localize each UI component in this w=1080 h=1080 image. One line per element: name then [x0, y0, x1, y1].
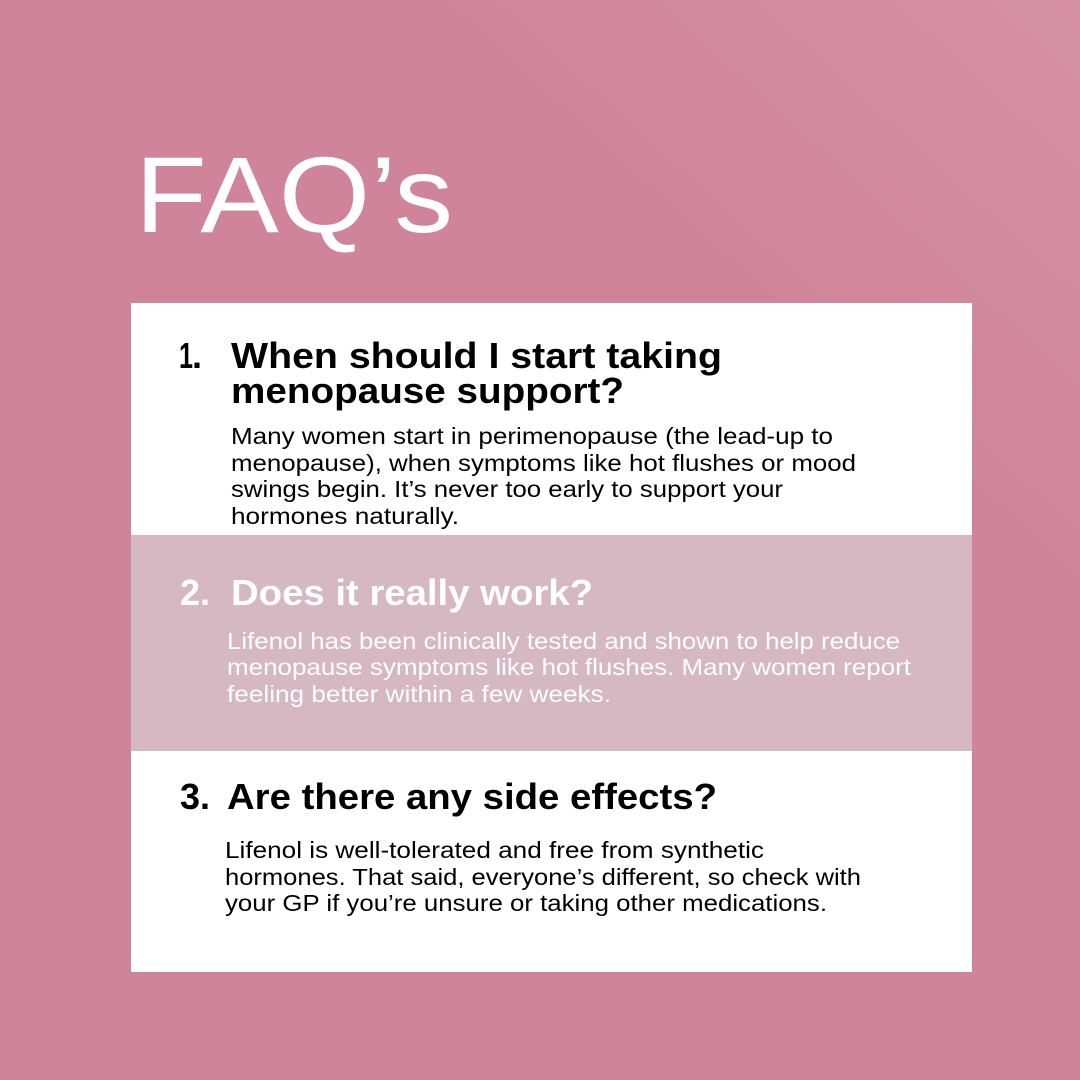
title: FAQ’s — [135, 134, 453, 255]
FAQ 1 heading: 1 — [179, 335, 193, 376]
FAQ 3 answer: your GP if you’re unsure or taking other medications. — [225, 890, 827, 916]
FAQ 3 answer: hormones. That said, everyone’s different, so check with — [225, 864, 861, 890]
FAQ 2 band — [131, 535, 972, 751]
FAQ 3 heading: Are there any side effects? — [227, 776, 717, 817]
FAQ 2 answer: Lifenol has been clinically tested and shown to help reduce — [227, 628, 900, 654]
FAQ 1 heading: . — [192, 335, 202, 376]
FAQ 3 heading: 3. — [180, 776, 210, 817]
FAQ 3 answer — [225, 837, 861, 916]
FAQ 1 answer: swings begin. It’s never too early to support your — [231, 476, 783, 502]
FAQ 1 — [179, 335, 856, 529]
FAQ 1 answer: hormones naturally. — [231, 503, 459, 529]
FAQ 2 answer: feeling better within a few weeks. — [227, 681, 611, 707]
FAQ 2 heading: Does it really work? — [231, 572, 593, 613]
FAQ 1 answer — [231, 423, 856, 529]
FAQ 1 heading: menopause support? — [231, 370, 624, 411]
FAQ 3 answer: Lifenol is well-tolerated and free from synthetic — [225, 837, 764, 863]
FAQ 2 answer — [227, 628, 912, 707]
FAQ 1 answer: Many women start in perimenopause (the lead-up to — [231, 423, 833, 449]
FAQ 2 answer: menopause symptoms like hot flushes. Many women report — [227, 654, 912, 680]
FAQ 3 — [180, 776, 861, 916]
panel: FAQ card — [131, 303, 972, 972]
FAQ 1 heading — [179, 335, 722, 411]
FAQ 1 answer: menopause), when symptoms like hot flushes or mood — [231, 450, 856, 476]
FAQ 2 heading: 2. — [180, 572, 210, 613]
FAQ 1 heading: When should I start taking — [231, 335, 722, 376]
